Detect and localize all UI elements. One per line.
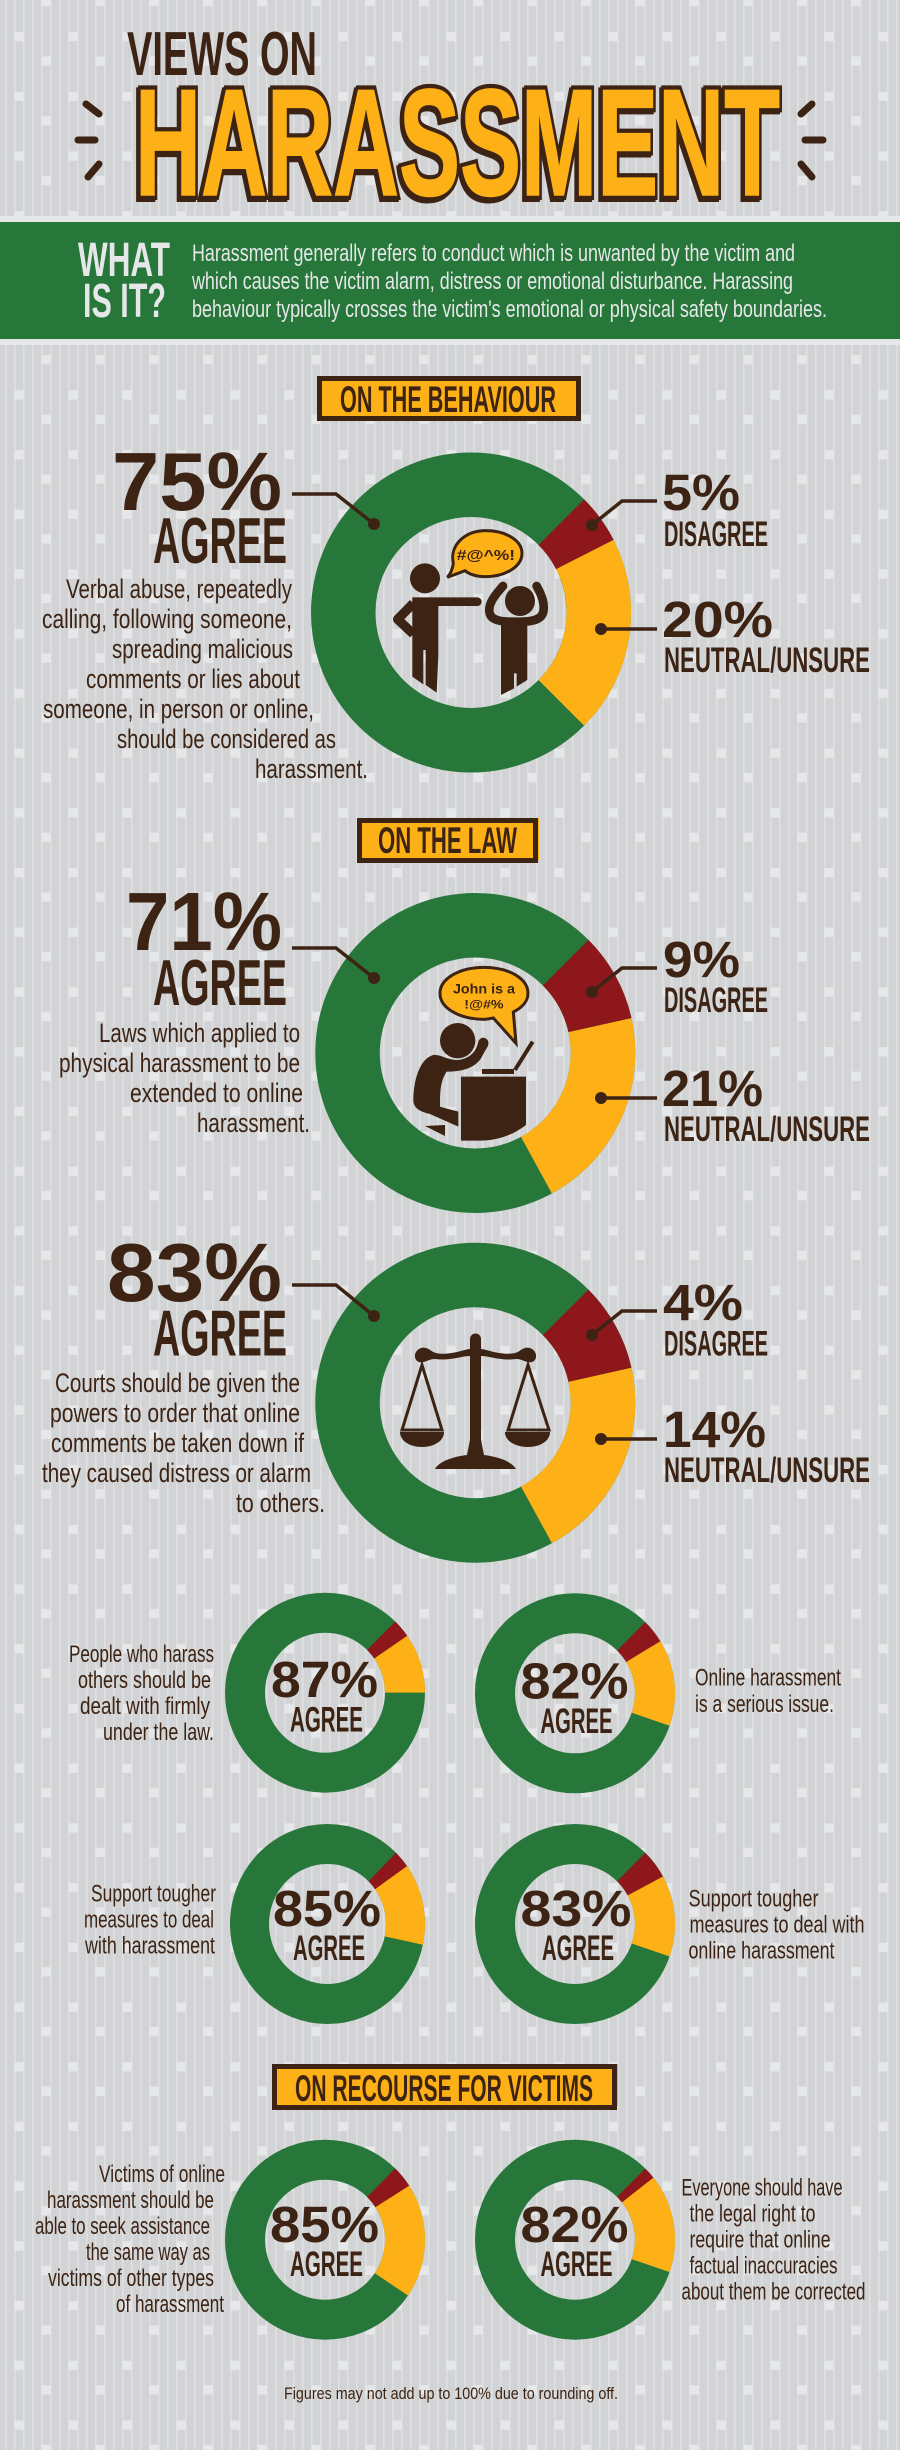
icon: scales of justice bbox=[400, 1334, 550, 1469]
stat: 87 percent bbox=[271, 1651, 378, 1740]
text: courts description: Courts should be given the bbox=[55, 1368, 300, 1398]
stat: 85 percent recourse: AGREE bbox=[290, 2245, 363, 2284]
section label: on recourse for victims: ON RECOURSE FOR VICTIMS bbox=[295, 2068, 593, 2109]
stat: 83 percent: AGREE bbox=[542, 1929, 614, 1968]
stat: 5 percent disagree: DISAGREE bbox=[664, 515, 768, 554]
section label: on the behaviour: ON THE BEHAVIOUR bbox=[340, 379, 556, 420]
text: victims assistance: able to seek assistance bbox=[35, 2213, 210, 2240]
text: law description: Laws which applied to bbox=[99, 1018, 300, 1048]
stat: 4 percent disagree: DISAGREE bbox=[664, 1324, 768, 1364]
stat: 82 percent recourse: AGREE bbox=[540, 2245, 612, 2284]
text: dealt with firmly: dealt with firmly bbox=[80, 1693, 210, 1720]
chart: courts donut bbox=[295, 1222, 656, 1583]
section label: on recourse for victims bbox=[274, 2064, 618, 2109]
text: victims assistance: of harassment bbox=[116, 2291, 224, 2318]
heading: what is it: WHAT bbox=[78, 234, 170, 287]
section label: on the law bbox=[359, 818, 539, 861]
stat: 4 percent disagree bbox=[663, 1274, 768, 1364]
stat: 20 percent neutral bbox=[662, 591, 870, 680]
chart: 85 percent recourse donut bbox=[212, 2127, 438, 2353]
text: courts description: comments be taken down if bbox=[51, 1428, 304, 1458]
chart: 82 percent donut bbox=[462, 1580, 688, 1806]
stat: 4 percent disagree: 4% bbox=[663, 1274, 743, 1331]
stat: 5 percent disagree: 5% bbox=[662, 464, 740, 521]
text: courts description bbox=[42, 1368, 325, 1518]
stat: 82 percent: AGREE bbox=[540, 1702, 612, 1741]
text: tougher online measures: online harassment bbox=[688, 1938, 835, 1965]
stat: 71 percent agree bbox=[59, 875, 310, 1138]
stat: 83 percent agree bbox=[42, 1226, 325, 1518]
text: behaviour description: calling, following someone, bbox=[42, 604, 292, 634]
text: law description: physical harassment to be bbox=[59, 1048, 300, 1078]
stat: 14 percent neutral bbox=[663, 1401, 870, 1490]
stat: 5 percent disagree bbox=[662, 464, 768, 554]
text: legal right: factual inaccuracies bbox=[690, 2253, 838, 2280]
text: legal right: the legal right to bbox=[690, 2201, 816, 2228]
text: legal right: require that online bbox=[690, 2227, 830, 2254]
text: tougher measures: Support tougher bbox=[91, 1881, 216, 1908]
icon: right rays bbox=[801, 104, 823, 177]
text: law description: harassment. bbox=[197, 1108, 310, 1138]
text: dealt with firmly: under the law. bbox=[103, 1719, 214, 1746]
section label: on the behaviour bbox=[319, 376, 581, 420]
text: tougher online measures bbox=[688, 1886, 864, 1965]
text: victims assistance: the same way as bbox=[86, 2239, 210, 2266]
panel: what is it bbox=[0, 216, 900, 345]
text: behaviour description: should be considered as bbox=[117, 724, 336, 754]
footnote: Figures may not add up to 100% due to rounding off. bbox=[284, 2384, 618, 2403]
chart: 87 percent donut bbox=[212, 1580, 438, 1806]
text: tougher measures: measures to deal bbox=[84, 1907, 214, 1934]
icon: person shouting at another person bbox=[398, 531, 544, 695]
text: victims assistance: Victims of online bbox=[99, 2161, 225, 2188]
icon: person shouting at another person: #@^%! bbox=[457, 548, 515, 564]
stat: 85 percent recourse bbox=[270, 2196, 379, 2284]
stat: 82 percent recourse: 82% bbox=[520, 2196, 628, 2253]
text: law description bbox=[59, 1018, 310, 1138]
stat: 85 percent recourse: 85% bbox=[270, 2196, 379, 2253]
text: dealt with firmly: People who harass bbox=[69, 1641, 214, 1668]
chart: behaviour donut bbox=[290, 432, 652, 793]
stat: 85 percent: 85% bbox=[273, 1880, 381, 1937]
stat: 85 percent bbox=[273, 1880, 381, 1968]
text: behaviour description bbox=[42, 574, 368, 784]
stat: 87 percent: 87% bbox=[271, 1651, 378, 1708]
heading: what is it bbox=[78, 234, 170, 328]
stat: 82 percent bbox=[520, 1652, 628, 1741]
stat: 20 percent neutral: 20% bbox=[662, 591, 773, 648]
stat: 82 percent: 82% bbox=[520, 1652, 628, 1710]
stat: 85 percent: AGREE bbox=[293, 1929, 365, 1968]
text: courts description: they caused distress or alarm bbox=[42, 1458, 311, 1488]
text: courts description: powers to order that online bbox=[50, 1398, 300, 1428]
title bbox=[78, 20, 823, 230]
text: legal right bbox=[682, 2175, 866, 2306]
stat: 83 percent agree: 83% bbox=[107, 1226, 282, 1319]
text: courts description: to others. bbox=[236, 1488, 325, 1518]
chart: 83 percent donut bbox=[462, 1811, 688, 2037]
icon: person typing insult at a desk bbox=[413, 967, 533, 1141]
stat: 75 percent agree: AGREE bbox=[153, 504, 287, 577]
icon: left rays bbox=[78, 104, 99, 177]
icon: person typing insult at a desk: !@#% bbox=[464, 997, 504, 1011]
text: behaviour description: Verbal abuse, repeatedly bbox=[66, 574, 292, 604]
stat: 9 percent disagree: DISAGREE bbox=[664, 981, 768, 1020]
callouts: courts leader lines bbox=[292, 1285, 657, 1445]
text: victims assistance bbox=[35, 2161, 225, 2318]
text: tougher online measures: Support tougher bbox=[688, 1886, 819, 1913]
chart: 82 percent recourse donut bbox=[462, 2127, 688, 2353]
callouts: law leader lines bbox=[292, 948, 657, 1104]
stat: 83 percent: 83% bbox=[520, 1880, 632, 1937]
text: definition bbox=[191, 240, 827, 323]
stat: 83 percent bbox=[520, 1880, 632, 1968]
icon: person typing insult at a desk: John is a bbox=[453, 981, 515, 996]
section label: on the law: ON THE LAW bbox=[378, 820, 517, 861]
text: tougher measures: with harassment bbox=[84, 1933, 215, 1960]
text: victims assistance: victims of other types bbox=[48, 2265, 214, 2292]
stat: 9 percent disagree: 9% bbox=[663, 931, 740, 988]
text: behaviour description: someone, in person or online, bbox=[43, 694, 314, 724]
text: law description: extended to online bbox=[130, 1078, 303, 1108]
text: serious issue: is a serious issue. bbox=[695, 1691, 834, 1718]
text: serious issue bbox=[695, 1665, 841, 1718]
text: behaviour description: comments or lies about bbox=[86, 664, 300, 694]
text: behaviour description: spreading malicious bbox=[112, 634, 293, 664]
stat: 75 percent agree: 75% bbox=[112, 435, 282, 528]
stat: 21 percent neutral: 21% bbox=[662, 1060, 763, 1117]
chart: law donut bbox=[295, 872, 656, 1234]
stat: 82 percent recourse bbox=[520, 2196, 628, 2284]
chart: 85 percent donut bbox=[217, 1811, 438, 2037]
text: dealt with firmly: others should be bbox=[78, 1667, 211, 1694]
heading: what is it: IS IT? bbox=[83, 275, 166, 328]
text: behaviour description: harassment. bbox=[255, 754, 368, 784]
text: serious issue: Online harassment bbox=[695, 1665, 841, 1692]
stat: 9 percent disagree bbox=[663, 931, 768, 1020]
stat: 87 percent: AGREE bbox=[290, 1700, 363, 1740]
stat: 83 percent agree: AGREE bbox=[153, 1296, 287, 1370]
stat: 71 percent agree: AGREE bbox=[153, 946, 287, 1019]
callouts: behaviour leader lines bbox=[292, 494, 657, 635]
stat: 14 percent neutral: 14% bbox=[663, 1401, 766, 1458]
stat: 71 percent agree: 71% bbox=[126, 875, 282, 968]
text: dealt with firmly bbox=[69, 1641, 214, 1746]
stat: 75 percent agree bbox=[42, 435, 368, 784]
text: victims assistance: harassment should be bbox=[47, 2187, 214, 2214]
title: views on: VIEWS ON bbox=[127, 20, 317, 89]
stat: 21 percent neutral bbox=[662, 1060, 870, 1149]
text: tougher measures bbox=[84, 1881, 216, 1960]
